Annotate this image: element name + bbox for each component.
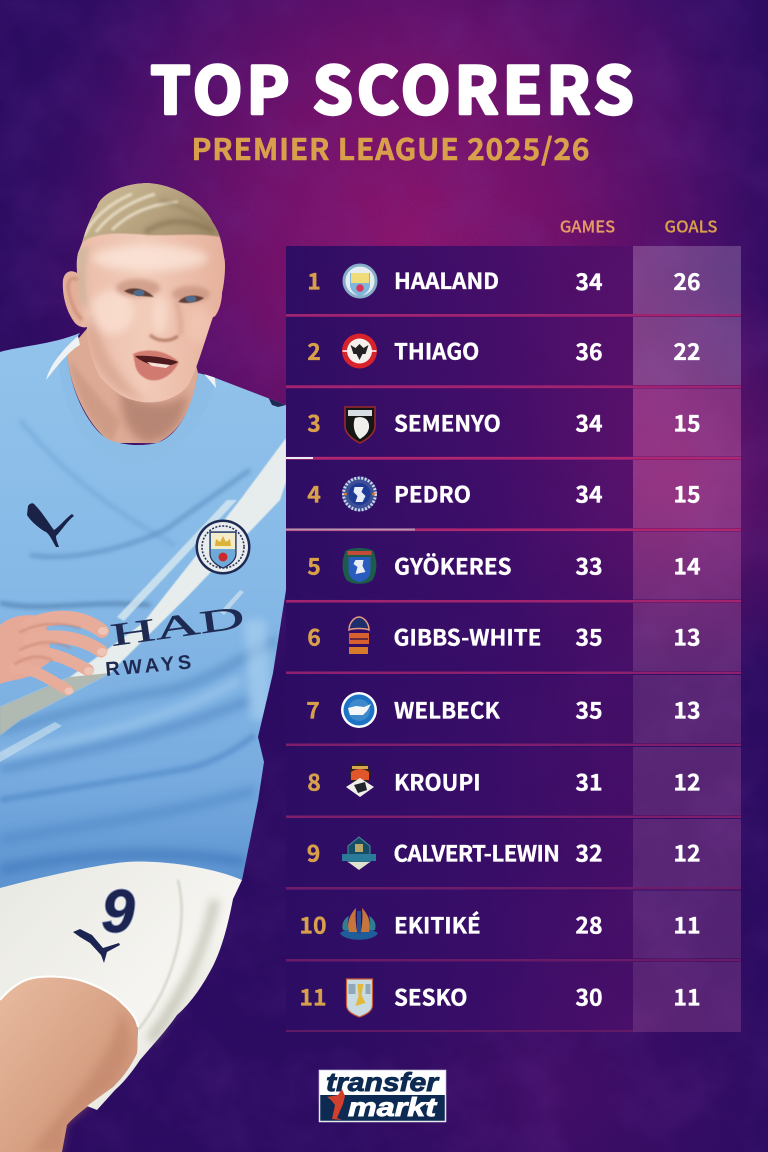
row 7 xyxy=(286,675,741,746)
row 1 xyxy=(286,246,741,316)
badge: Man City xyxy=(343,264,377,298)
subtitle: PREMIER LEAGUE 2025/26 xyxy=(192,125,590,169)
shorts number 9: 9 xyxy=(101,878,135,945)
row 5: GYÖKERES xyxy=(394,550,512,582)
row 2 xyxy=(286,317,741,388)
row 4: PEDRO xyxy=(394,478,471,510)
row 2: 22 xyxy=(673,333,701,367)
player head xyxy=(62,170,226,404)
row 5: 5 xyxy=(307,548,321,582)
row 1: HAALAND xyxy=(394,264,499,296)
row 9: 32 xyxy=(575,834,603,868)
row 7: WELBECK xyxy=(394,694,501,726)
badge: Gyökeres club xyxy=(343,548,376,584)
column header: goals: GOALS xyxy=(665,214,717,238)
row 4: 34 xyxy=(575,476,603,510)
transfermarkt logo: markt xyxy=(348,1092,438,1122)
title: TOP SCORERS xyxy=(150,40,634,132)
row 9: 9 xyxy=(307,834,320,868)
badge: Brentford xyxy=(342,334,377,368)
row 9 xyxy=(286,819,741,890)
row 10 xyxy=(286,890,741,962)
row 6: GIBBS-WHITE xyxy=(394,620,541,652)
row 4 xyxy=(286,460,741,531)
row 10: 11 xyxy=(673,906,701,940)
row 11: SESKO xyxy=(394,980,467,1012)
row 7: 7 xyxy=(306,692,320,726)
row 2: 2 xyxy=(307,333,321,367)
row 11: 11 xyxy=(673,978,701,1012)
transfermarkt logo xyxy=(320,1067,446,1122)
row 8: KROUPI xyxy=(394,766,481,798)
player shirt xyxy=(0,333,286,888)
collar white trim xyxy=(46,336,80,380)
row 3: 34 xyxy=(575,404,603,438)
row 11: 30 xyxy=(575,978,603,1012)
badge: Brighton xyxy=(341,692,377,728)
player hand xyxy=(0,615,108,694)
mouth xyxy=(133,350,179,380)
player leg xyxy=(0,977,138,1152)
shirt sponsor text xyxy=(105,598,247,681)
separator highlights over table left edge xyxy=(286,457,415,530)
shirt sponsor text: HAD xyxy=(108,598,247,653)
shorts puma logo xyxy=(73,929,120,963)
row 4: 15 xyxy=(673,476,701,510)
badge: Bournemouth xyxy=(345,407,375,443)
row 5: 33 xyxy=(575,548,603,582)
eye socket shadows xyxy=(116,279,160,297)
row 8: 31 xyxy=(575,764,603,798)
badge: Chelsea xyxy=(342,476,377,512)
row 10: 28 xyxy=(575,906,603,940)
row 6: 35 xyxy=(575,618,603,652)
badge: Liverpool xyxy=(340,908,378,940)
badge: Nottingham Forest xyxy=(349,617,369,654)
ear shading xyxy=(68,278,82,320)
row 10: EKITIKÉ xyxy=(394,908,481,940)
row 7: 13 xyxy=(673,692,701,726)
row 4: 4 xyxy=(307,476,321,510)
shirt club badge xyxy=(196,520,250,574)
row 6 xyxy=(286,603,741,674)
row 2: THIAGO xyxy=(394,334,479,366)
nose xyxy=(150,335,178,340)
row 5: 14 xyxy=(673,548,701,582)
badge: Bournemouth variant xyxy=(346,763,374,797)
column header: games: GAMES xyxy=(560,214,615,238)
row 1: 1 xyxy=(307,262,321,296)
collar band xyxy=(67,355,216,446)
badge: Man United variant xyxy=(346,979,372,1017)
row 8: 8 xyxy=(307,764,321,798)
row 8 xyxy=(286,747,741,818)
table: top scorers xyxy=(286,214,741,1032)
row 10: 10 xyxy=(299,906,327,940)
shirt diagonal stripes xyxy=(0,438,286,735)
shirt sponsor text: RWAYS xyxy=(105,652,192,681)
eyes xyxy=(124,288,154,297)
transfermarkt logo: transfer xyxy=(326,1067,440,1097)
row 5 xyxy=(286,532,741,602)
row 3: 3 xyxy=(307,404,321,438)
row 6: 6 xyxy=(307,618,321,652)
row 1: 26 xyxy=(673,263,701,297)
row 11 xyxy=(286,962,741,1032)
row 3 xyxy=(286,388,741,460)
row 3: SEMENYO xyxy=(394,406,501,438)
badge: Everton xyxy=(342,837,376,870)
player neck xyxy=(67,325,198,443)
row 11: 11 xyxy=(299,978,327,1012)
row 7: 35 xyxy=(575,692,603,726)
player photo: footballer in light-blue shirt xyxy=(0,170,286,1152)
player shorts xyxy=(0,857,242,1110)
row 8: 12 xyxy=(673,764,701,798)
row 9: CALVERT-LEWIN xyxy=(394,836,559,868)
hair xyxy=(82,183,220,242)
forehead and cheek highlights xyxy=(92,245,208,271)
row 3: 15 xyxy=(673,404,701,438)
row 1: 34 xyxy=(575,263,603,297)
shirt puma logo xyxy=(27,503,74,547)
row 6: 13 xyxy=(673,618,701,652)
shirt folds xyxy=(20,420,175,545)
row 2: 36 xyxy=(575,333,603,367)
row 9: 12 xyxy=(673,834,701,868)
